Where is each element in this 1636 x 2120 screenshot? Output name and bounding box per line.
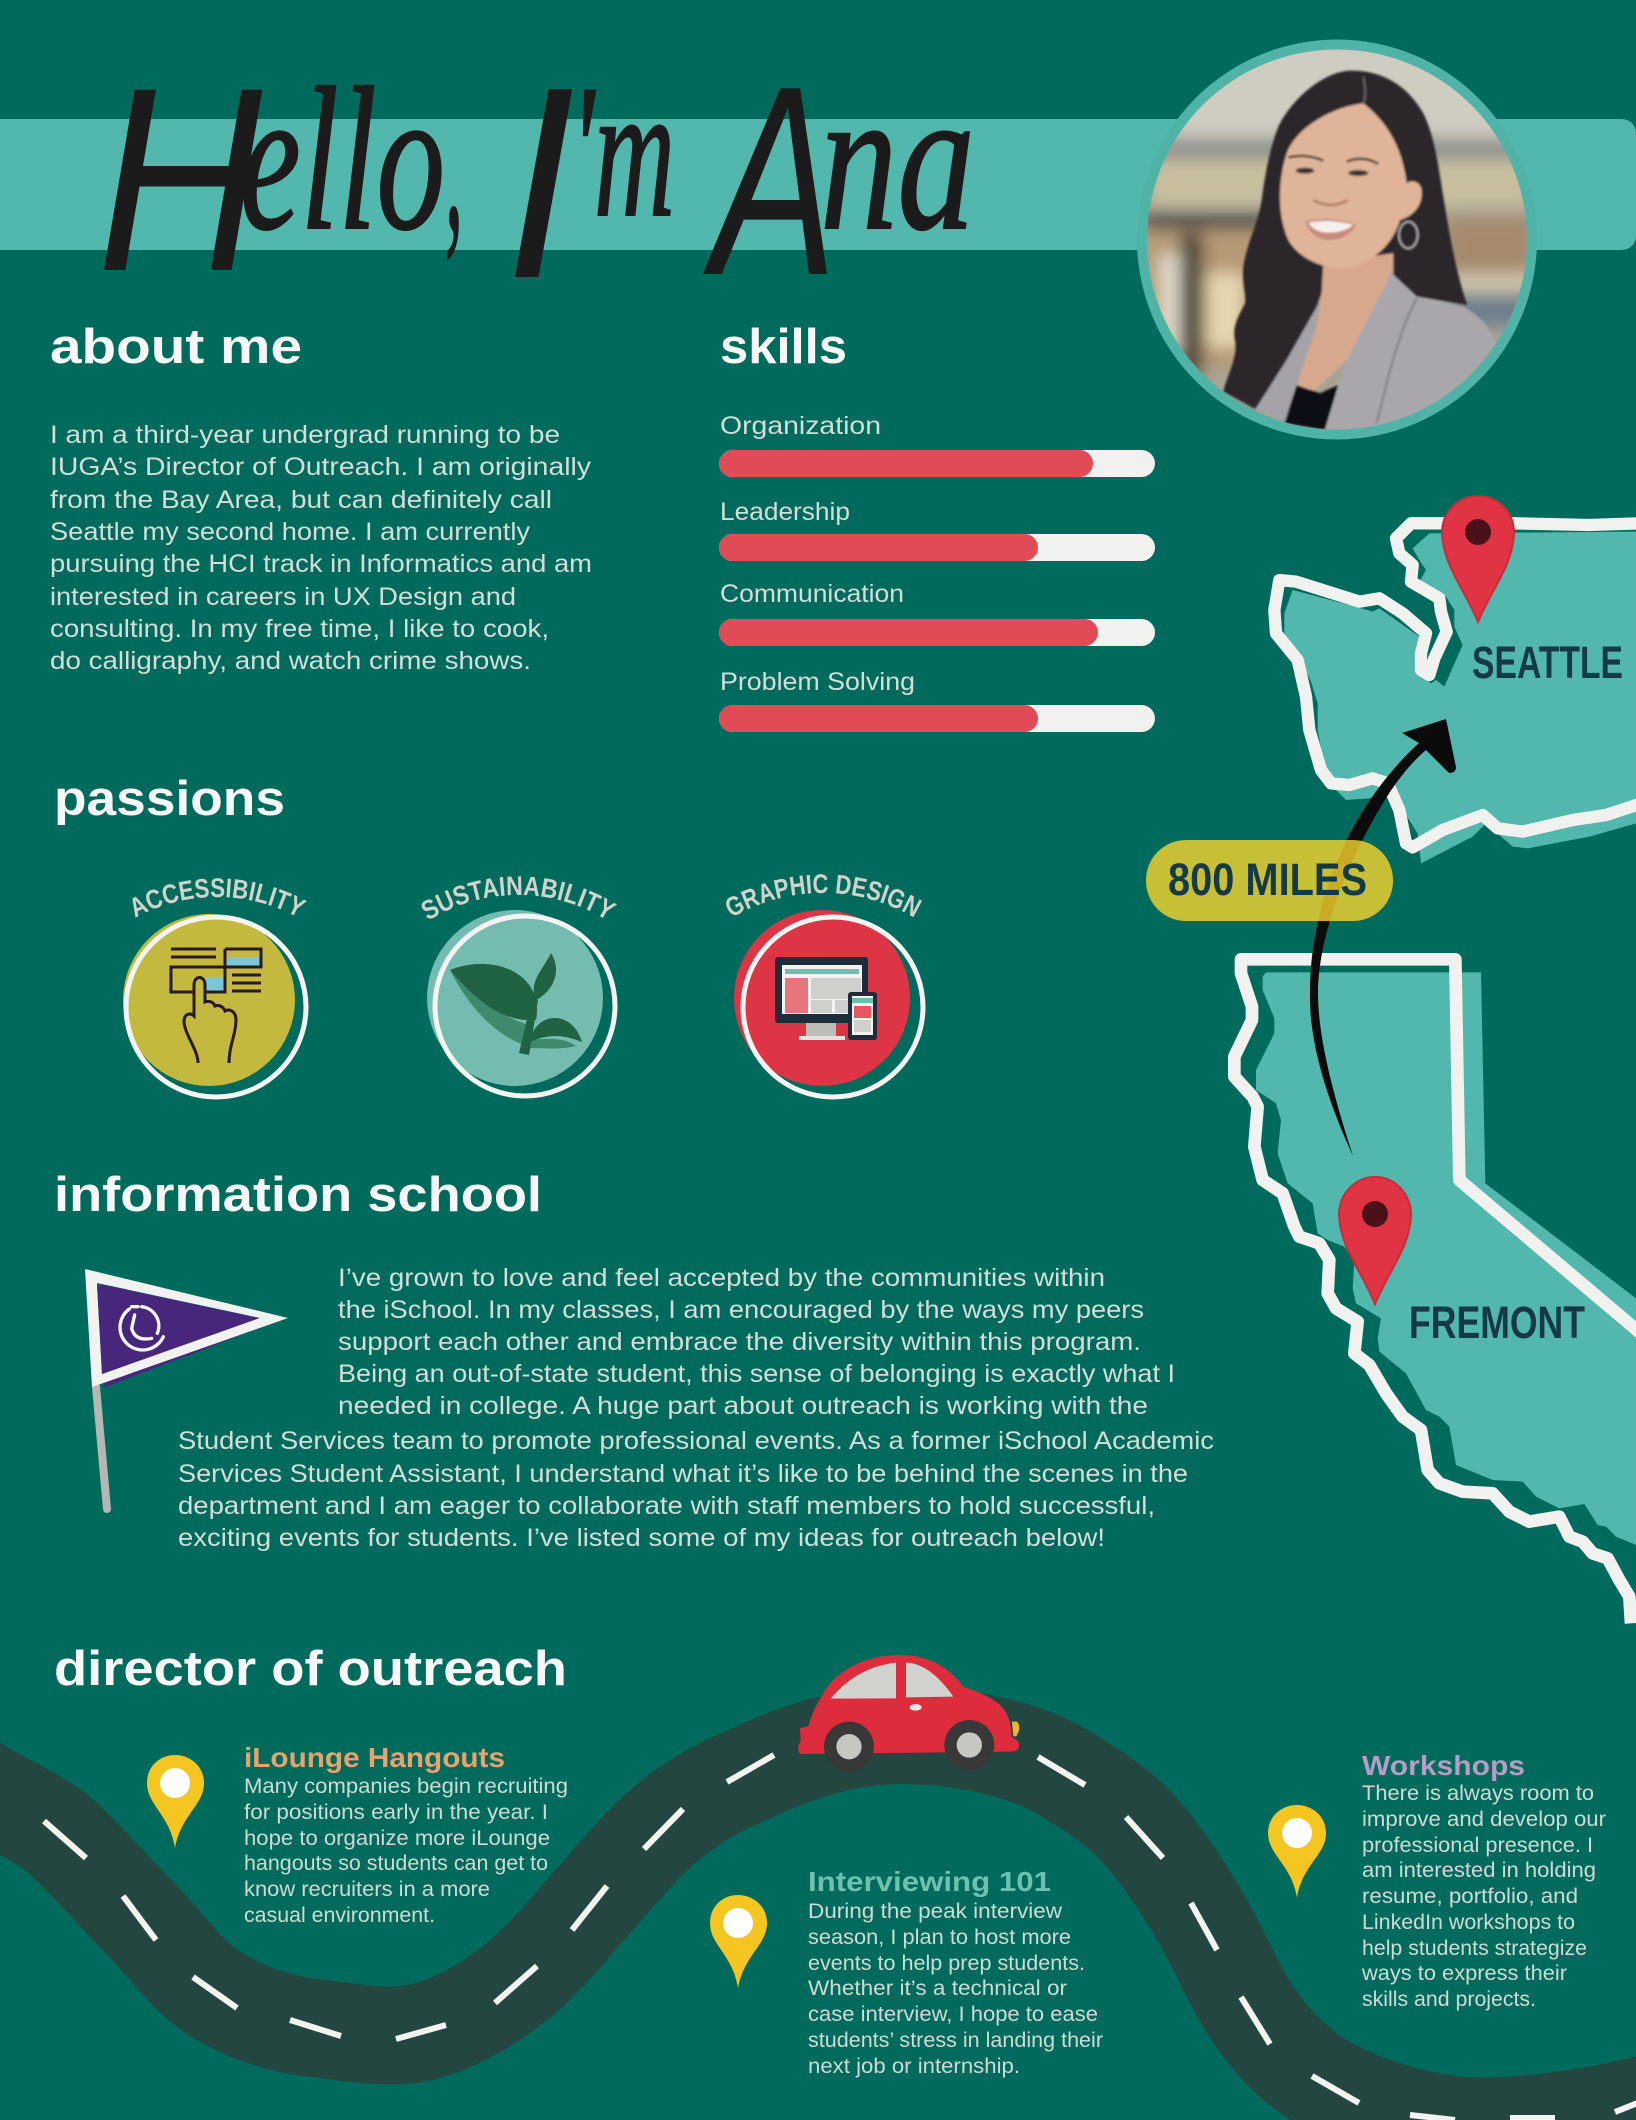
callout: 800 miles bbox=[1146, 840, 1393, 921]
description: During the peak interview bbox=[808, 1900, 1063, 1923]
text block: information school: support each other and embrace the diversity within this program. bbox=[338, 1328, 1141, 1356]
jacket bbox=[1255, 300, 1321, 422]
description bbox=[1361, 1782, 1606, 2011]
description: resume, portfolio, and bbox=[1362, 1885, 1578, 1908]
description bbox=[244, 1775, 568, 1927]
description: season, I plan to host more bbox=[808, 1926, 1071, 1949]
text block: information school: needed in college. A huge part about outreach is working with the bbox=[338, 1392, 1148, 1420]
map pin: Fremont bbox=[1339, 1177, 1411, 1304]
car bbox=[798, 1655, 1019, 1772]
arrow: Fremont to Seattle bbox=[1310, 719, 1456, 1156]
description: know recruiters in a more bbox=[244, 1878, 490, 1901]
text block: about me: consulting. In my free time, I like to cook, bbox=[50, 615, 549, 643]
icon: plant leaves bbox=[450, 953, 582, 1055]
title: I bbox=[505, 30, 576, 335]
map: Washington state bbox=[1274, 523, 1636, 863]
neck bbox=[1297, 253, 1393, 390]
description: ways to express their bbox=[1361, 1962, 1567, 1985]
icon: touch screen hand bbox=[171, 949, 261, 1063]
map pin: Seattle bbox=[1442, 496, 1514, 622]
label: graphic design: GRAPHIC DESIGN bbox=[726, 874, 922, 918]
map: California state bbox=[1234, 959, 1636, 1623]
heading: passions: passions bbox=[54, 772, 285, 826]
description: professional presence. I bbox=[1362, 1834, 1593, 1857]
description: hangouts so students can get to bbox=[244, 1852, 548, 1875]
icon: yellow pin bbox=[147, 1755, 204, 1848]
text block: information school: Services Student Assistant, I understand what it’s like to be behind the scenes in the bbox=[178, 1460, 1188, 1488]
text block: information school: Being an out-of-state student, this sense of belonging is exactly what I bbox=[338, 1360, 1175, 1388]
description: improve and develop our bbox=[1362, 1808, 1606, 1831]
face bbox=[1280, 103, 1422, 268]
skill: organization: Organization bbox=[720, 412, 881, 440]
title: A bbox=[700, 31, 837, 332]
skill: problem solving bbox=[719, 668, 1155, 732]
text block: about me bbox=[50, 421, 592, 675]
portrait photo bbox=[1130, 40, 1550, 440]
heading: about me: about me bbox=[50, 320, 302, 374]
text block: about me: from the Bay Area, but can definitely call bbox=[50, 486, 552, 514]
title: ello bbox=[240, 46, 445, 273]
earring bbox=[1399, 222, 1418, 248]
stop: Interviewing 101 bbox=[710, 1866, 1103, 2078]
description: Many companies begin recruiting bbox=[244, 1775, 568, 1798]
label: accessibility: ACCESSIBILITY bbox=[132, 878, 307, 918]
description: casual environment. bbox=[244, 1904, 435, 1927]
text block: about me: I am a third-year undergrad running to be bbox=[50, 421, 560, 449]
label: sustainability: SUSTAINABILITY bbox=[422, 876, 617, 919]
description: next job or internship. bbox=[808, 2055, 1020, 2078]
heading: skills: skills bbox=[720, 320, 847, 374]
label: Fremont: FREMONT bbox=[1409, 1297, 1585, 1348]
text block: information school: Student Services team to promote professional events. As a former iSchool Academic bbox=[178, 1427, 1214, 1455]
skill: problem solving: Problem Solving bbox=[720, 668, 915, 696]
road lane dashes bbox=[44, 1755, 1636, 2120]
description: am interested in holding bbox=[1362, 1859, 1596, 1882]
title: , bbox=[445, 46, 463, 273]
icon: monitor and phone bbox=[775, 957, 877, 1040]
text block: information school: I’ve grown to love and feel accepted by the communities within bbox=[338, 1264, 1105, 1292]
text block: about me: interested in careers in UX Design and bbox=[50, 583, 516, 611]
description bbox=[808, 1900, 1103, 2078]
description: hope to organize more iLounge bbox=[244, 1827, 550, 1850]
header banner bbox=[0, 119, 1636, 250]
callout: 800 miles: 800 MILES bbox=[1168, 854, 1367, 905]
passion: sustainability bbox=[422, 876, 618, 1098]
description: There is always room to bbox=[1362, 1782, 1594, 1805]
skill: leadership: Leadership bbox=[720, 498, 850, 526]
title: H bbox=[97, 33, 265, 326]
subheading: Workshops bbox=[1362, 1750, 1525, 1781]
eyes and brows bbox=[1288, 156, 1378, 164]
icon: yellow pin bbox=[1268, 1805, 1326, 1898]
description: students’ stress in landing their bbox=[808, 2029, 1103, 2052]
title: na bbox=[820, 46, 975, 273]
stop: Workshops bbox=[1268, 1750, 1606, 2011]
passion: graphic design bbox=[726, 874, 926, 1100]
icon: yellow pin bbox=[710, 1895, 767, 1988]
description: LinkedIn workshops to bbox=[1362, 1911, 1575, 1934]
title: 'm bbox=[570, 47, 675, 257]
skills bar chart bbox=[719, 412, 1155, 732]
text block: about me: pursuing the HCI track in Informatics and am bbox=[50, 550, 592, 578]
text block: information school: department and I am eager to collaborate with staff members to hold successful, bbox=[178, 1492, 1155, 1520]
subheading: iLounge Hangouts bbox=[244, 1742, 505, 1773]
description: help students strategize bbox=[1362, 1937, 1587, 1960]
description: for positions early in the year. I bbox=[244, 1801, 548, 1824]
smile bbox=[1305, 219, 1357, 240]
icon: iSchool pennant flag bbox=[85, 1269, 288, 1509]
skill: communication bbox=[719, 580, 1155, 646]
skill: leadership bbox=[719, 498, 1155, 561]
skill: communication: Communication bbox=[720, 580, 904, 608]
winding road bbox=[0, 1735, 1636, 2120]
text block: about me: do calligraphy, and watch crime shows. bbox=[50, 647, 531, 675]
description: Whether it’s a technical or bbox=[808, 1977, 1067, 2000]
text block: about me: IUGA’s Director of Outreach. I am originally bbox=[50, 453, 592, 481]
description: skills and projects. bbox=[1362, 1988, 1536, 2011]
black top bbox=[1284, 385, 1338, 430]
passion: accessibility bbox=[123, 878, 308, 1100]
heading: director of outreach: director of outreach bbox=[54, 1642, 567, 1696]
subheading: Interviewing 101 bbox=[808, 1866, 1051, 1897]
hair bbox=[1223, 71, 1467, 410]
text block: information school: exciting events for students. I’ve listed some of my ideas for outreach below! bbox=[178, 1524, 1105, 1552]
skill: organization bbox=[719, 412, 1155, 477]
description: events to help prep students. bbox=[808, 1952, 1085, 1975]
text block: about me: Seattle my second home. I am currently bbox=[50, 518, 531, 546]
heading: information school: information school bbox=[54, 1168, 542, 1222]
description: case interview, I hope to ease bbox=[808, 2003, 1098, 2026]
text block: information school: the iSchool. In my classes, I am encouraged by the ways my peers bbox=[338, 1296, 1144, 1324]
text block: information school bbox=[178, 1264, 1214, 1552]
icon: iSchool logo bbox=[120, 1307, 163, 1350]
stop: iLounge Hangouts bbox=[147, 1742, 568, 1927]
